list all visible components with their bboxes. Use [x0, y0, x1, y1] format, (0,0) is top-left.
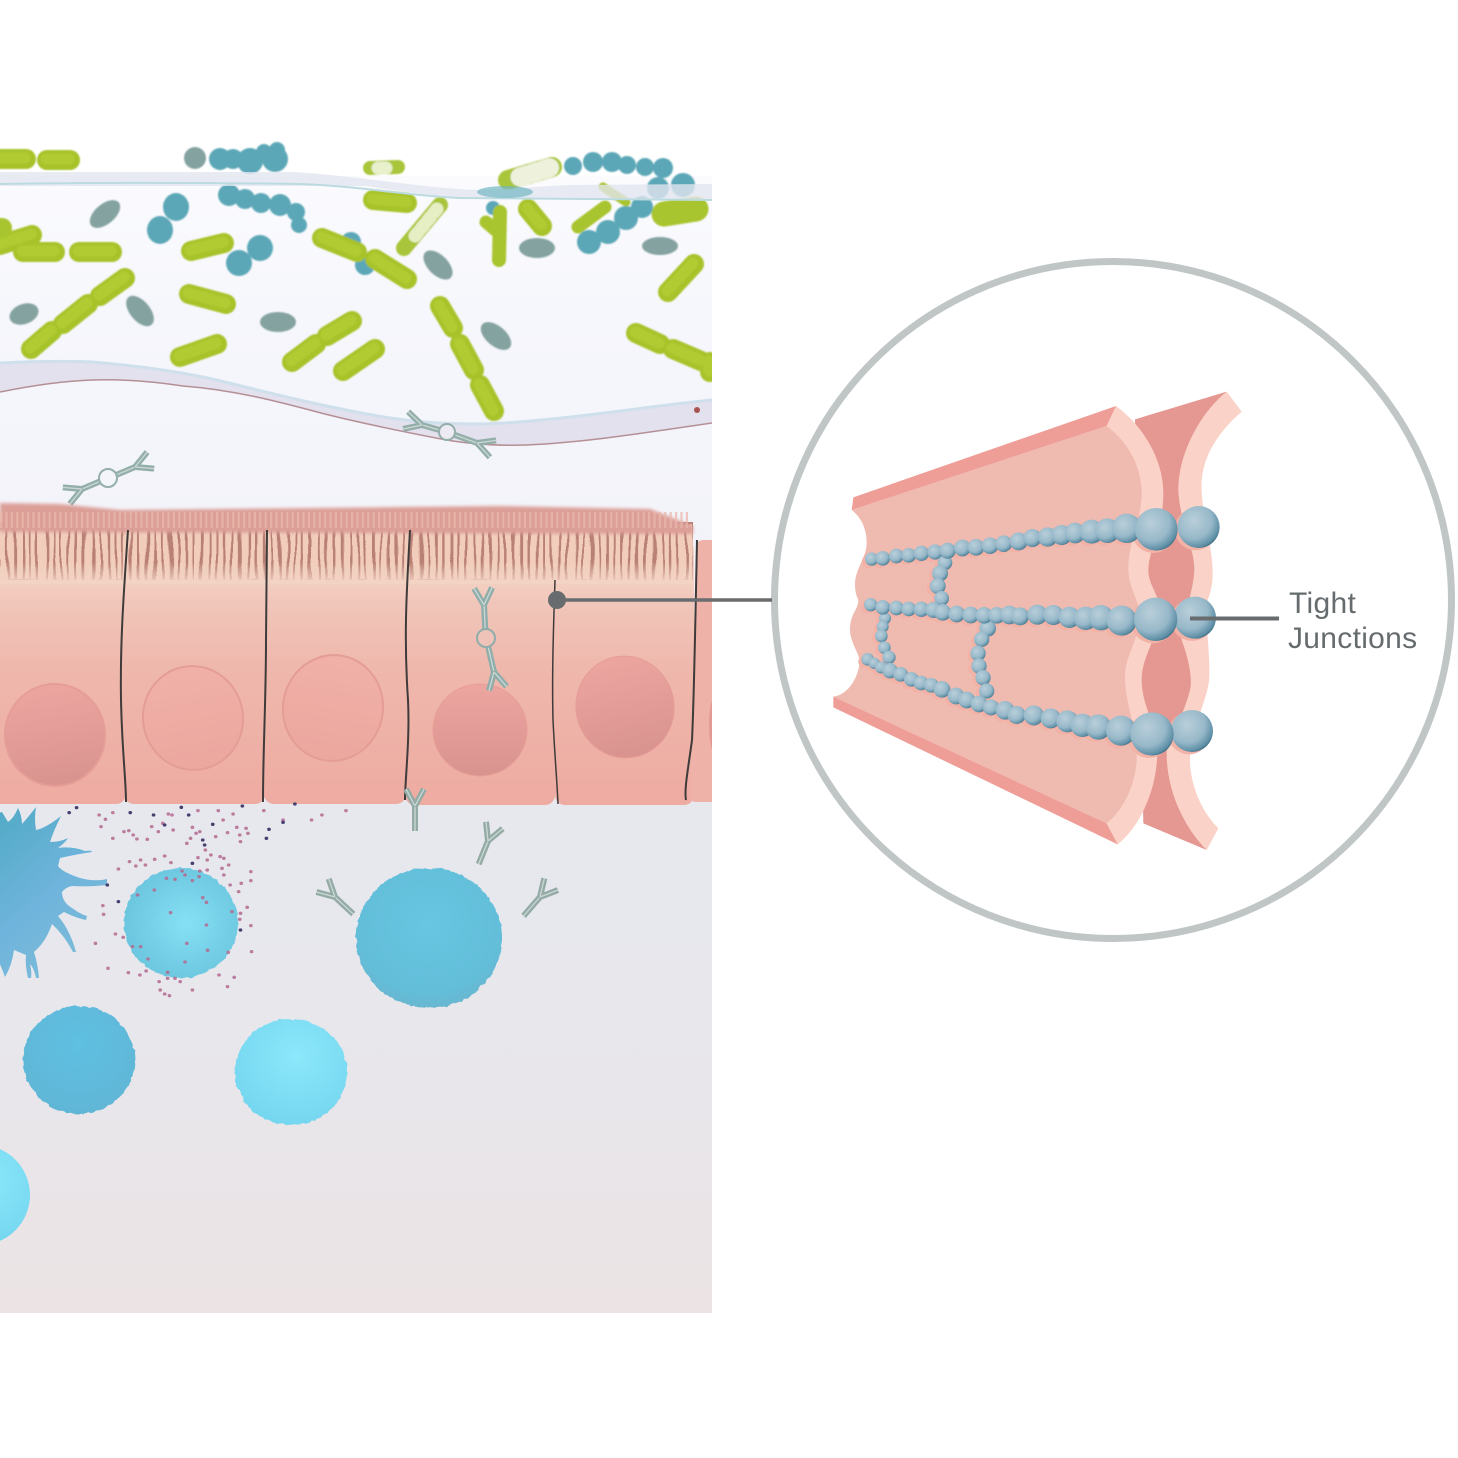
nucleus 2 — [142, 665, 244, 771]
front cell light band — [1107, 406, 1163, 844]
back cell wall — [1135, 392, 1227, 850]
panel: gut lining cross-section — [0, 142, 723, 1313]
epithelial cell 3 — [264, 540, 406, 804]
epithelial cell 6 — [692, 540, 712, 802]
immune cell at left edge — [0, 1145, 30, 1245]
antibody dimer on mucus — [403, 412, 496, 457]
nucleus 1 — [4, 683, 106, 787]
cytokine particles pink — [95, 811, 346, 996]
immune cell lower left — [23, 1006, 135, 1114]
cell dividers — [121, 530, 697, 804]
cytokine particles dark — [69, 804, 295, 930]
upper mucus layer — [0, 172, 712, 200]
antibody left of large cell — [316, 879, 359, 921]
epithelial cell 2 — [124, 540, 265, 804]
microvilli backing — [0, 522, 693, 580]
pointer line — [1190, 616, 1279, 620]
grey bacteria — [6, 147, 678, 355]
antibody right of large cell — [517, 878, 558, 922]
back cell light band — [1167, 392, 1242, 850]
label: Tight Junctions: Junctions — [1288, 622, 1417, 655]
epithelial cell layer — [0, 503, 723, 805]
striped green bacteria — [370, 167, 552, 248]
antibody at cell base — [406, 789, 424, 831]
bottom face strip — [833, 697, 1118, 844]
magnifier circle — [774, 262, 1452, 938]
top face strip — [852, 406, 1116, 510]
green rod bacteria — [0, 159, 710, 411]
front cell face — [833, 426, 1142, 823]
tight junction diagram — [833, 392, 1242, 850]
large immune cell — [356, 868, 502, 1008]
teal cocci chains — [147, 142, 695, 276]
antibody dimer crossing cell — [474, 588, 507, 691]
label: Tight Junctions: Tight — [1289, 587, 1356, 620]
bead shadows — [858, 508, 1217, 758]
epithelial cell 4 — [405, 540, 555, 805]
microvilli — [0, 525, 693, 581]
villi fade — [0, 564, 693, 580]
antibody above large cell — [470, 822, 503, 868]
epithelial cell 1 — [0, 580, 125, 804]
epithelial cell 5 — [555, 540, 694, 805]
immune cell with cytokines — [124, 868, 238, 978]
dendritic cell — [0, 807, 107, 978]
bacteria behind upper mucus layer — [0, 142, 710, 411]
nucleus 5 — [576, 656, 674, 758]
nucleus 4 — [433, 684, 527, 776]
callout connector — [548, 591, 772, 609]
branched and thin green bacteria — [0, 187, 696, 260]
nucleus 3 — [282, 654, 384, 762]
free antibody dimer — [63, 452, 154, 504]
junction protein beads — [861, 506, 1220, 756]
immune cell lower centre — [235, 1019, 347, 1125]
lower mucus layer — [0, 361, 712, 445]
brush border fuzz — [0, 503, 693, 534]
brush border texture — [0, 512, 690, 528]
nucleus 6 edge — [709, 701, 712, 749]
rod highlights — [0, 158, 709, 410]
panel background — [0, 176, 712, 1313]
